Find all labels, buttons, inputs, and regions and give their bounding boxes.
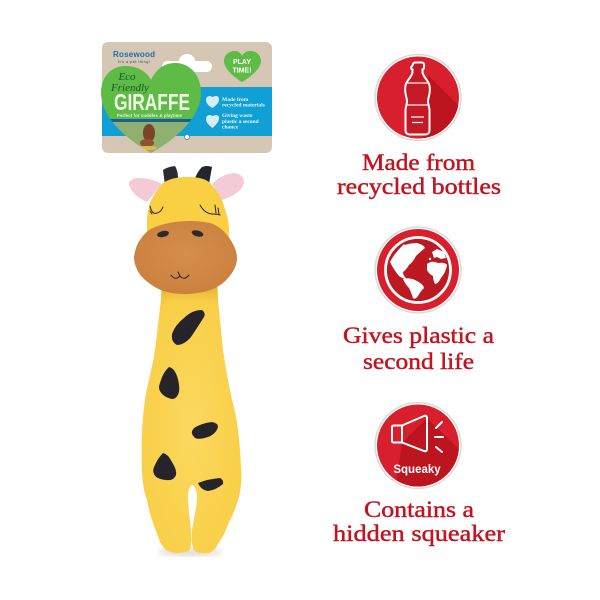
dog photo: [110, 119, 192, 153]
text: gives plastic a second life: [343, 323, 495, 375]
icon: recycled bottle: [374, 54, 462, 142]
text: made from recycled bottles: [337, 150, 501, 200]
brand logo: Rosewood: [113, 50, 155, 59]
icon: squeaker speaker: [374, 402, 462, 490]
blue band: [102, 87, 272, 136]
nostrils: [157, 230, 169, 238]
body spots: [159, 367, 179, 399]
hang hole: [162, 54, 212, 72]
card eyelet: [184, 134, 190, 140]
heart: play time: PLAY: [233, 59, 251, 66]
packaging card: chance: [222, 124, 239, 130]
text: contains a hidden squeaker: Contains a: [364, 497, 475, 523]
heart: eco friendly giraffe: GIRAFFE: [114, 89, 190, 115]
horns: [163, 166, 178, 185]
ears: [129, 178, 162, 202]
packaging card: recycled materials: [222, 102, 265, 108]
packaging card: plastic a second: [222, 119, 259, 125]
eyes: [150, 205, 220, 278]
mouth: [171, 275, 189, 278]
heart: play time: [224, 51, 261, 82]
icon: squeaker speaker: Squeaky: [393, 464, 441, 476]
floor shadow: [158, 548, 222, 556]
neck spot top: [172, 310, 205, 345]
heart: play time: TIME!: [232, 68, 252, 74]
body: [142, 280, 241, 553]
text: contains a hidden squeaker: [333, 497, 505, 547]
text: made from recycled bottles: Made from: [362, 150, 475, 176]
brand logo: It's a pet thing!: [118, 59, 150, 64]
heart: eco friendly giraffe: Eco: [117, 71, 136, 83]
icon: globe: [375, 227, 461, 313]
text: contains a hidden squeaker: hidden squeaker: [333, 521, 505, 547]
brand logo: [113, 50, 155, 64]
text: gives plastic a second life: second life: [363, 349, 474, 375]
text: made from recycled bottles: recycled bottles: [337, 174, 501, 200]
muzzle: [134, 221, 237, 294]
giraffe plush toy: [129, 166, 244, 556]
heart: eco friendly giraffe: Friendly: [110, 82, 149, 94]
bullet text 2: Giving waste: [222, 113, 253, 119]
neck shade: [160, 282, 218, 307]
heart: eco friendly giraffe: [101, 63, 201, 154]
heart: eco friendly giraffe: Perfect for cuddles & playtime: [117, 113, 183, 118]
bullet text 1: Made from: [222, 97, 249, 103]
heart bullet 1: [206, 96, 219, 108]
head: [147, 177, 229, 255]
heart bullet 2: [206, 115, 219, 128]
text: gives plastic a second life: Gives plastic a: [343, 323, 495, 349]
packaging card: [101, 42, 272, 154]
